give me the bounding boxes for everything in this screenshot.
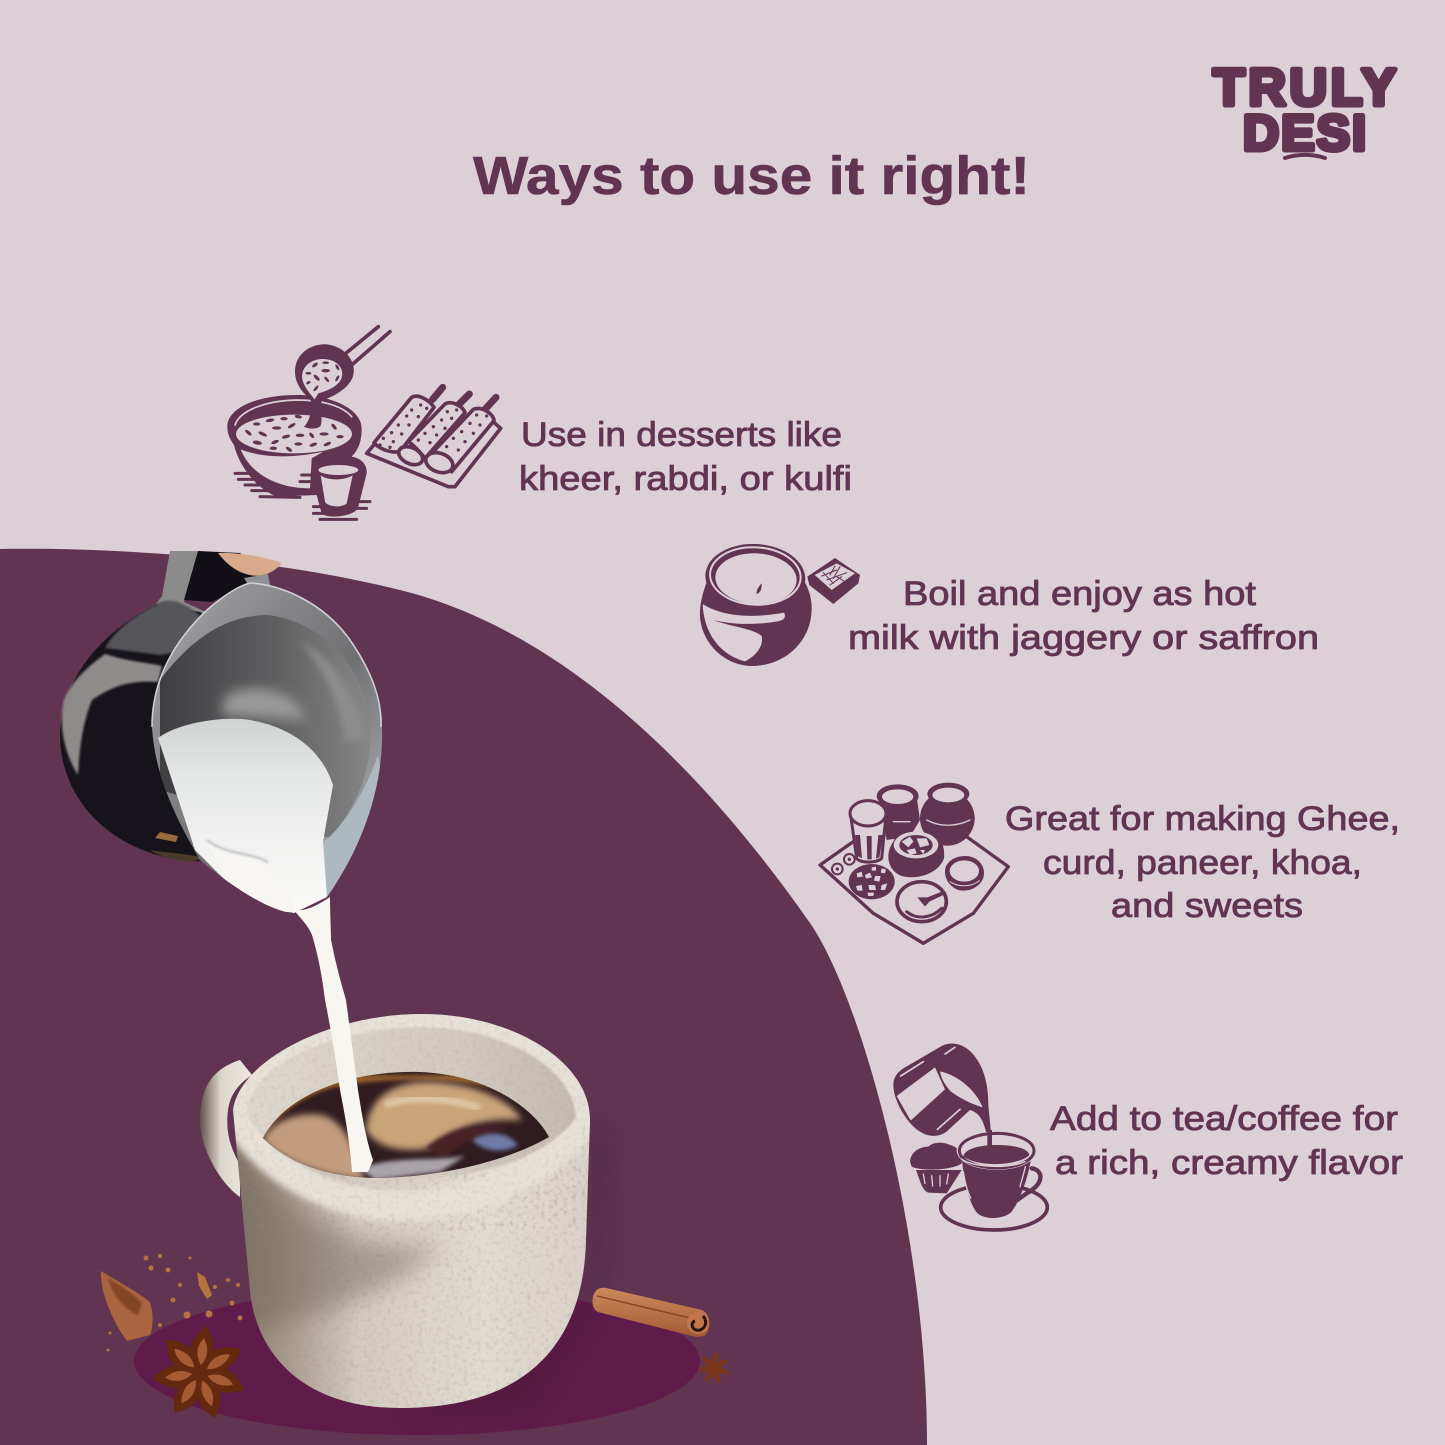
saucer <box>941 1185 1047 1230</box>
text: ghee: Great for making Ghee, <box>1005 800 1400 838</box>
milk stream <box>294 897 373 1172</box>
mug handle <box>200 1060 252 1197</box>
jug handle and finger <box>156 551 282 622</box>
icon: jug pouring into cup with muffin <box>893 1043 1047 1230</box>
small circles <box>832 854 855 874</box>
mug body <box>225 1010 595 1410</box>
tray <box>367 423 501 487</box>
jug front <box>152 584 382 913</box>
jug rim highlight <box>152 583 381 727</box>
photo: coffee mug <box>200 1010 610 1412</box>
back pot <box>877 784 920 840</box>
ladle handle <box>345 327 390 365</box>
text: tea/coffee: Add to tea/coffee for <box>1050 1100 1398 1138</box>
centre bowl <box>888 832 944 877</box>
spice chunk <box>101 1271 153 1341</box>
cup <box>318 465 358 506</box>
muffin <box>910 1143 962 1193</box>
sticks <box>433 387 496 409</box>
small bowl <box>945 856 984 891</box>
text: hot milk: Boil and enjoy as hot <box>903 575 1257 613</box>
spice crumbs <box>106 1254 242 1352</box>
jug <box>893 1043 991 1137</box>
right pot <box>920 783 975 846</box>
glass <box>850 801 886 862</box>
photo: milk jug <box>60 551 390 920</box>
mug shadow <box>400 1120 610 1412</box>
text: desserts <box>519 416 852 498</box>
spice ellipse <box>134 1287 700 1435</box>
tray <box>820 837 1008 943</box>
text: tea/coffee: a rich, creamy flavor <box>1055 1144 1403 1182</box>
text: tea/coffee <box>1050 1100 1403 1182</box>
pot body <box>700 570 812 666</box>
jug back body <box>60 601 240 862</box>
text: hot milk <box>848 575 1319 657</box>
bowl <box>227 395 367 517</box>
pour stream <box>987 1130 992 1147</box>
icon: clay pot and saffron box <box>700 541 860 666</box>
text: ghee <box>1005 800 1400 925</box>
text: ghee: and sweets <box>1111 887 1303 925</box>
saffron box <box>807 558 860 604</box>
title: Ways to use it right! <box>473 146 1030 206</box>
plate with spoon <box>897 882 946 922</box>
pot rim <box>704 541 807 613</box>
small star anise <box>697 1351 731 1385</box>
logo: Truly Desi: DESI <box>1243 105 1366 161</box>
logo: Truly Desi: TRULY <box>1213 59 1396 117</box>
cookie plate <box>849 864 895 899</box>
pot drop <box>757 583 762 594</box>
text: ghee: curd, paneer, khoa, <box>1043 844 1362 882</box>
text: hot milk: milk with jaggery or saffron <box>848 619 1319 657</box>
icon: kheer bowl, ladle and rolls <box>227 327 501 519</box>
pot highlight <box>703 604 785 661</box>
table shadow lines <box>235 473 370 519</box>
large star anise <box>151 1326 248 1421</box>
cinnamon stick <box>593 1288 709 1337</box>
cup <box>957 1131 1040 1218</box>
panel: purple curved shape <box>0 549 927 1445</box>
logo: Truly Desi <box>1213 59 1396 161</box>
rice grains <box>244 414 344 453</box>
text: desserts: kheer, rabdi, or kulfi <box>519 460 852 498</box>
roll dots <box>378 403 488 452</box>
icon: thali with pots <box>820 783 1008 943</box>
coffee surface <box>263 1072 549 1178</box>
ladle and stream <box>295 344 354 429</box>
rolls <box>374 396 494 476</box>
text: desserts: Use in desserts like <box>521 416 842 454</box>
